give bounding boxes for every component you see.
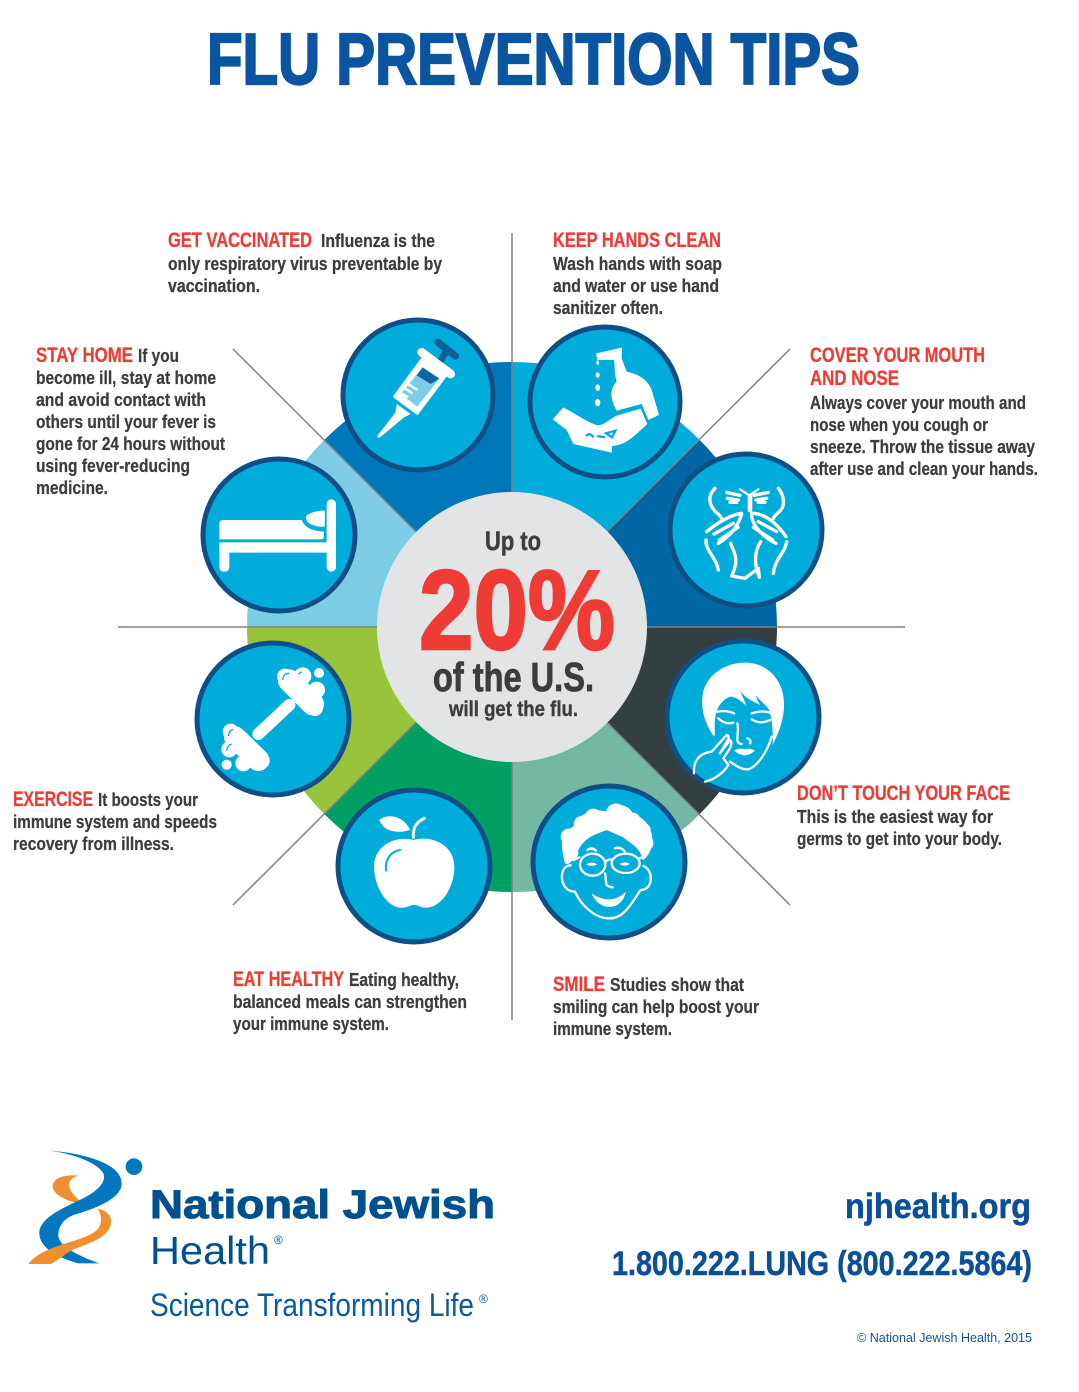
- icon: smiling face: [533, 786, 685, 938]
- text: cover your mouth and nose: sneeze. Throw the tissue away: [810, 437, 1035, 457]
- icon: bed: [203, 459, 355, 611]
- text: keep hands clean: and water or use hand: [553, 276, 719, 296]
- text: eat healthy: EAT HEALTHY: [233, 968, 344, 991]
- center circle callout: [377, 492, 647, 762]
- text: don't touch your face: DON’T TOUCH YOUR FACE: [797, 782, 1010, 805]
- text: stay home: gone for 24 hours without: [36, 434, 225, 454]
- text: smile: immune system.: [553, 1019, 672, 1039]
- center circle callout: 20%: [419, 547, 615, 673]
- center circle callout: Up to: [485, 526, 541, 556]
- icon: syringe: [343, 320, 493, 470]
- text: exercise: immune system and speeds: [13, 812, 217, 832]
- text: smile: Studies show that: [610, 975, 744, 995]
- text: stay home: STAY HOME: [36, 344, 133, 367]
- text: stay home: others until your fever is: [36, 412, 216, 432]
- text: get vaccinated: only respiratory virus preventable by: [168, 254, 442, 274]
- text: cover your mouth and nose: COVER YOUR MOUTH: [810, 344, 985, 367]
- text: stay home: become ill, stay at home: [36, 368, 216, 388]
- text: eat healthy: Eating healthy,: [349, 970, 459, 990]
- text: get vaccinated: [168, 229, 442, 296]
- contact details: njhealth.org: [845, 1187, 1031, 1226]
- text: don't touch your face: This is the easiest way for: [797, 807, 993, 827]
- text: get vaccinated: vaccination.: [168, 276, 260, 296]
- text: exercise: recovery from illness.: [13, 834, 174, 854]
- text: stay home: If you: [138, 346, 179, 366]
- text: eat healthy: your immune system.: [233, 1014, 389, 1034]
- title: FLU PREVENTION TIPS: [207, 20, 860, 100]
- icon: touching face: [667, 641, 819, 793]
- contact details: [612, 1187, 1032, 1283]
- text: smile: SMILE: [553, 973, 605, 996]
- copyright: © National Jewish Health, 2015: [857, 1331, 1032, 1345]
- pie wheel of coloured wedges: [118, 233, 905, 1020]
- text: cover your mouth and nose: Always cover your mouth and: [810, 393, 1026, 413]
- text: keep hands clean: sanitizer often.: [553, 298, 663, 318]
- text: cover your mouth and nose: nose when you cough or: [810, 415, 988, 435]
- text: eat healthy: [233, 968, 467, 1034]
- text: exercise: [13, 788, 217, 854]
- text: cover your mouth and nose: after use and clean your hands.: [810, 459, 1038, 479]
- logo: National Jewish Health: [28, 1151, 495, 1323]
- text: stay home: using fever-reducing: [36, 456, 190, 476]
- text: stay home: [36, 344, 225, 498]
- text: stay home: medicine.: [36, 478, 108, 498]
- text: keep hands clean: KEEP HANDS CLEAN: [553, 229, 721, 252]
- text: don't touch your face: [797, 782, 1010, 849]
- icon: dumbbell: [197, 643, 349, 795]
- logo: National Jewish Health: Health: [150, 1230, 270, 1273]
- text: eat healthy: balanced meals can strengthen: [233, 992, 467, 1012]
- icon: apple: [338, 790, 490, 942]
- text: keep hands clean: Wash hands with soap: [553, 254, 722, 274]
- text: exercise: EXERCISE: [13, 788, 93, 811]
- icon: soap and hands: [530, 327, 680, 477]
- logo: National Jewish Health: ®: [274, 1233, 283, 1247]
- text: get vaccinated: GET VACCINATED: [168, 229, 312, 252]
- text: stay home: and avoid contact with: [36, 390, 206, 410]
- text: don't touch your face: germs to get into your body.: [797, 829, 1002, 849]
- text: cover your mouth and nose: [810, 344, 1038, 479]
- icon: covering mouth and nose: [670, 454, 822, 606]
- logo: National Jewish Health: Science Transforming Life: [150, 1287, 474, 1323]
- icon: helix logo mark: [28, 1151, 142, 1264]
- logo: National Jewish Health: National Jewish: [150, 1183, 495, 1227]
- text: cover your mouth and nose: AND NOSE: [810, 367, 899, 390]
- text: smile: [553, 973, 759, 1039]
- text: get vaccinated: Influenza is the: [321, 231, 435, 251]
- text: exercise: It boosts your: [98, 790, 198, 810]
- center circle callout: of the U.S.: [433, 654, 594, 700]
- center circle callout: will get the flu.: [448, 698, 578, 721]
- text: smile: smiling can help boost your: [553, 997, 759, 1017]
- logo: National Jewish Health: ®: [479, 1292, 488, 1306]
- text: keep hands clean: [553, 229, 722, 318]
